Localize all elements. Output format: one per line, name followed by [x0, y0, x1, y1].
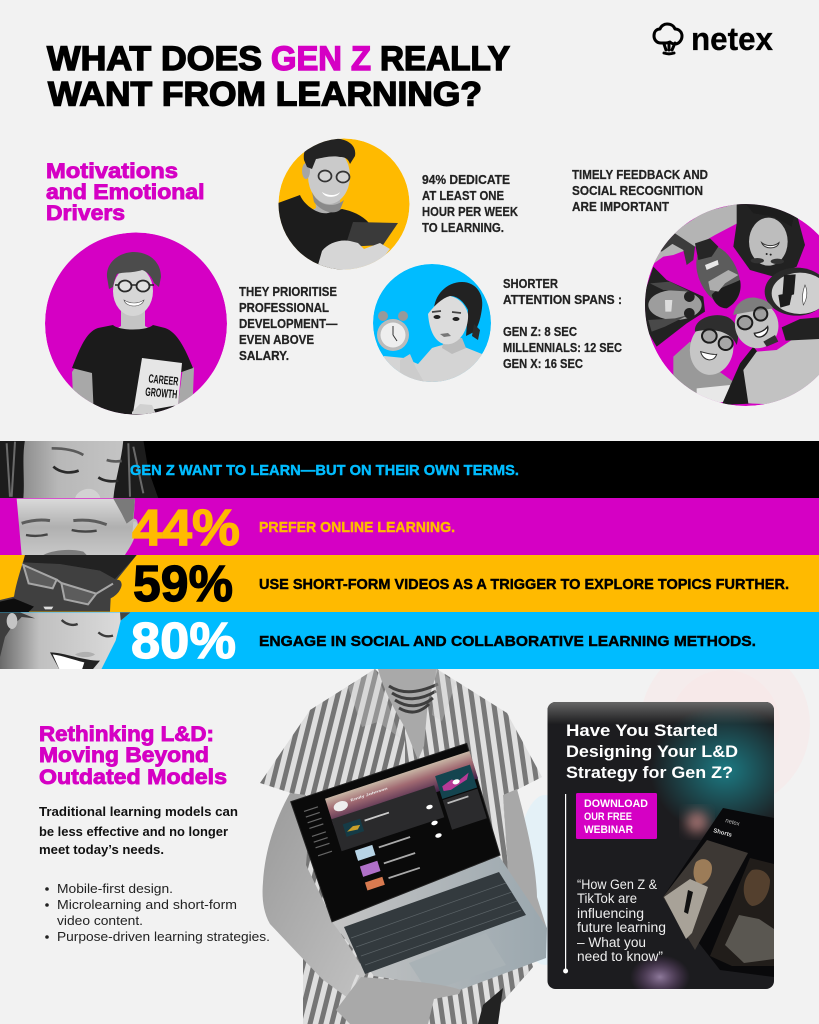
card title: Designing Your L&D [566, 742, 738, 761]
button: download our free webinar: WEBINAR [584, 824, 633, 836]
list: solutions: Microlearning and short-form [57, 898, 237, 912]
right arm [503, 789, 547, 929]
card: webinar call to action [548, 702, 774, 989]
bar: 59% short-form videos: 59% [133, 555, 233, 612]
keyboard [344, 872, 526, 974]
text: timely feedback: SOCIAL RECOGNITION [572, 183, 703, 198]
photo strip: face 2 [17, 499, 138, 555]
laptop screen [291, 743, 500, 922]
webinar quote [577, 877, 666, 964]
icon: tablet [345, 222, 398, 247]
heading: motivations and emotional drivers: Drivers [46, 201, 125, 225]
upper-left arms [654, 204, 737, 264]
title: GEN Z [271, 40, 371, 78]
bar: 59% short-form videos: USE SHORT-FORM VIDEOS AS A TRIGGER TO EXPLORE TOPICS FURTHER. [259, 577, 789, 593]
text: traditional learning models: meet today’s needs. [39, 842, 164, 857]
photo: woman with alarm clock [373, 264, 491, 384]
phone illustration: Shorts [712, 828, 733, 839]
collar [348, 669, 456, 738]
webinar quote: need to know” [577, 949, 663, 964]
heading: rethinking L&D: Moving Beyond [39, 743, 209, 767]
webinar quote: future learning [577, 920, 666, 935]
upper-left man [696, 247, 740, 302]
text: traditional learning models [39, 804, 238, 857]
bar: 44% online learning: 44% [132, 499, 240, 556]
phone illustration: netex [724, 818, 740, 828]
text: prioritise professional development: EVEN ABOVE [239, 332, 314, 347]
background: soft glow circles [524, 670, 780, 965]
title: WANT FROM LEARNING? [48, 76, 482, 114]
list: solutions: Purpose-driven learning strategies. [57, 930, 270, 944]
centre man [734, 308, 778, 348]
list: solutions: Mobile-first design. [57, 882, 173, 896]
text: prioritise professional development [239, 284, 338, 363]
icon: alarm clock [376, 311, 424, 382]
shirt [260, 669, 542, 1024]
bar: black headline [0, 440, 819, 499]
text: 94% dedicate [422, 172, 519, 235]
bar: 59% short-form videos [0, 555, 819, 613]
right face [765, 268, 819, 316]
hand [336, 977, 461, 1024]
photo strip: face 3 [0, 555, 137, 613]
text: prioritise professional development: PROFESSIONAL [239, 300, 329, 315]
text: shorter attention spans: MILLENNIALS: 12 SEC [503, 340, 623, 355]
text: shorter attention spans: SHORTER [503, 276, 559, 291]
text: 94% dedicate: HOUR PER WEEK [422, 204, 519, 219]
logo: netex: netex [691, 21, 773, 57]
book: career growth: CAREER [148, 371, 179, 389]
text: timely feedback [572, 167, 708, 214]
bar: black headline: GEN Z WANT TO LEARN—BUT ON THEIR OWN TERMS. [130, 463, 519, 479]
laptop base [332, 856, 547, 990]
heading: rethinking L&D [39, 722, 227, 789]
photo: person in striped shirt holding laptop [260, 669, 547, 1024]
phone illustration [663, 808, 774, 977]
bar: 80% social learning: 80% [131, 612, 236, 669]
webinar quote: TikTok are [577, 891, 637, 906]
text: shorter attention spans: GEN Z: 8 SEC [503, 324, 578, 339]
timeline line [563, 794, 568, 974]
heading: rethinking L&D: Outdated Models [39, 765, 227, 789]
webinar quote: influencing [577, 906, 644, 921]
heading: motivations and emotional drivers: and Emotional [46, 180, 205, 204]
text: prioritise professional development: DEVELOPMENT— [239, 316, 338, 331]
lower-left man [673, 342, 733, 403]
webinar quote: – What you [577, 935, 646, 950]
bar: 80% social learning: ENGAGE IN SOCIAL AND COLLABORATIVE LEARNING METHODS. [259, 634, 756, 650]
webinar quote: “How Gen Z & [577, 877, 657, 892]
title: WHAT DOES [47, 40, 262, 78]
text: 94% dedicate: 94% DEDICATE [422, 172, 510, 187]
text: shorter attention spans: ATTENTION SPANS : [503, 292, 622, 307]
laptop [291, 743, 547, 992]
text: timely feedback: ARE IMPORTANT [572, 199, 669, 214]
text: shorter attention spans [503, 276, 623, 371]
bar: 44% online learning: PREFER ONLINE LEARNING. [259, 520, 455, 536]
photo: woman holding career growth book [45, 232, 227, 422]
button: download our free webinar [576, 793, 657, 839]
trackpad [410, 956, 429, 983]
title [47, 40, 510, 114]
text: 94% dedicate: AT LEAST ONE [422, 188, 504, 203]
icon: cloud tree [654, 24, 682, 54]
list: solutions [45, 882, 270, 944]
left arm [263, 793, 366, 1001]
photo strip: face 4 [0, 612, 131, 671]
card title: Strategy for Gen Z? [566, 763, 733, 782]
photo: group huddle [643, 203, 819, 407]
text: prioritise professional development: SALARY. [239, 348, 289, 363]
laptop: Emily Johnson [350, 786, 388, 802]
left woman [643, 267, 705, 347]
photo: man with tablet [278, 138, 410, 279]
logo: netex [654, 21, 773, 57]
book: career growth [133, 358, 182, 413]
heading: motivations and emotional drivers: Motivations [46, 159, 178, 183]
list: solutions: video content. [57, 914, 143, 928]
photo strip: face 1 [0, 440, 158, 499]
text: traditional learning models: be less effective and no longer [39, 824, 228, 839]
heading: rethinking L&D: Rethinking L&D: [39, 722, 214, 746]
title: REALLY [380, 40, 510, 78]
card title: Have You Started [566, 721, 718, 740]
book: career growth: GROWTH [145, 385, 178, 401]
top face [733, 203, 805, 277]
text: prioritise professional development: THEY PRIORITISE [239, 284, 337, 299]
button: download our free webinar: DOWNLOAD [584, 798, 648, 810]
text: 94% dedicate: TO LEARNING. [422, 220, 504, 235]
card title [566, 721, 738, 782]
bottom right clothing [722, 347, 760, 405]
necklace [389, 684, 438, 712]
neck [378, 669, 438, 760]
text: traditional learning models: Traditional learning models can [39, 804, 238, 819]
button: download our free webinar: OUR FREE [584, 811, 632, 823]
bar: 80% social learning [0, 612, 819, 671]
text: shorter attention spans: GEN X: 16 SEC [503, 356, 584, 371]
heading: motivations and emotional drivers [46, 159, 205, 225]
bar: 44% online learning [0, 498, 819, 556]
text: timely feedback: TIMELY FEEDBACK AND [572, 167, 708, 182]
